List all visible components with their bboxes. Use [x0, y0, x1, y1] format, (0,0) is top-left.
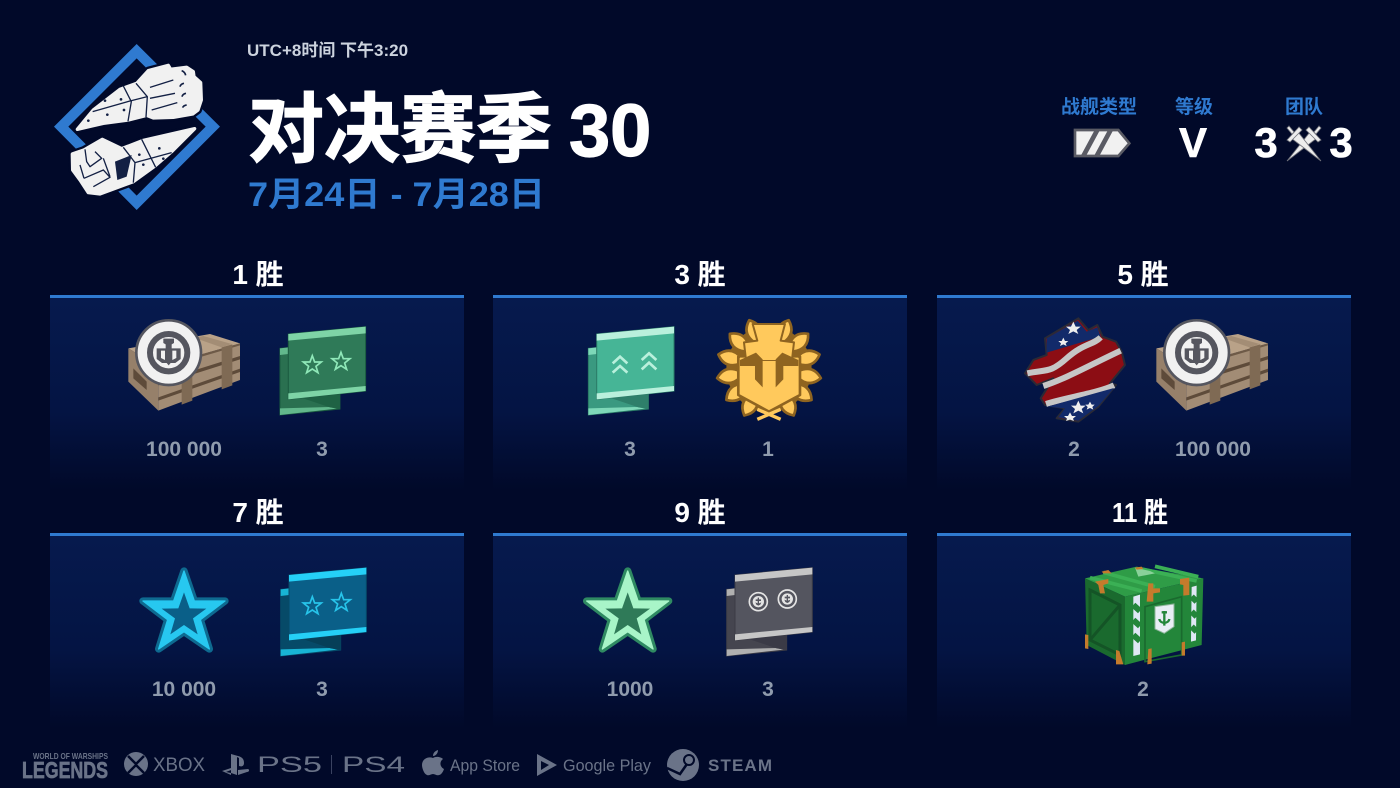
title: 30 — [569, 89, 651, 172]
info: tier: V — [1179, 119, 1207, 166]
panel: 1 win: 100 000 — [146, 438, 222, 461]
info: ship type: 战舰类型 — [1061, 96, 1137, 118]
info: tier: 等级 — [1175, 95, 1213, 118]
panel: 1 win: 3 — [316, 438, 328, 461]
logo: Google Play: Google Play — [563, 756, 651, 775]
icon: crossed swords — [1287, 126, 1321, 161]
panel: 1 win — [50, 259, 464, 490]
logo: crossed gauntlets in diamond — [54, 44, 220, 210]
panel: 5 wins: 5 胜 — [1117, 259, 1169, 290]
panel: 5 wins — [937, 259, 1351, 490]
logo: PlayStation — [222, 752, 405, 777]
panel: 5 wins: 2 — [1068, 438, 1080, 461]
panel: 3 wins: 3 — [624, 438, 636, 461]
logo: Xbox — [124, 752, 205, 776]
logo: App Store: App Store — [450, 756, 520, 775]
panel: 1 win: 1 胜 — [232, 259, 284, 290]
timestamp: UTC+8时间 下午3:20 — [247, 40, 408, 60]
logo: World of Warships Legends: WORLD OF WARSHIPS — [33, 751, 108, 761]
info: team size: 3 — [1329, 119, 1353, 166]
panel: 3 wins: 1 — [762, 438, 774, 461]
logo: PlayStation: PS4 — [342, 752, 405, 777]
panel: 11 wins: 2 — [1137, 678, 1149, 701]
logo: World of Warships Legends: LEGENDS — [22, 757, 108, 783]
icon: ship class — [1075, 130, 1129, 156]
panel: 7 wins: 10 000 — [152, 678, 216, 701]
panel: 11 wins — [937, 497, 1351, 728]
panel: 7 wins: 7 胜 — [232, 497, 284, 528]
info: tier — [1175, 95, 1213, 166]
panel: 7 wins — [50, 497, 464, 728]
lower gauntlet — [72, 129, 195, 194]
info: ship type — [1061, 96, 1137, 156]
panel: 11 wins: 11 胜 — [1112, 497, 1168, 528]
info: team size — [1254, 96, 1353, 166]
icon: stars and stripes camouflage — [1025, 318, 1125, 422]
icon: green container — [1085, 566, 1203, 665]
dates: 7月24日 - 7月28日 — [248, 176, 545, 214]
icon: credits crate — [128, 320, 240, 411]
panel: 3 wins: 3 胜 — [674, 259, 726, 290]
icon: teal chevron signal — [588, 327, 674, 415]
logo: PlayStation: PS5 — [257, 752, 322, 777]
panel: 9 wins: 1000 — [607, 678, 653, 701]
panel: 7 wins: 3 — [316, 678, 328, 701]
logo: Google Play — [537, 754, 651, 776]
icon: green star signal — [280, 327, 366, 415]
panel: 9 wins: 9 胜 — [674, 497, 726, 528]
logo: Steam — [667, 749, 772, 781]
logo: Xbox: XBOX — [153, 755, 205, 776]
title: 对决赛季 — [248, 88, 552, 173]
footer: platform logos — [22, 749, 772, 783]
logo: World of Warships Legends — [22, 751, 108, 783]
logo: Steam: STEAM — [708, 756, 772, 775]
upper gauntlet — [77, 65, 201, 129]
icon: credits crate — [1156, 320, 1268, 411]
panel: 9 wins — [493, 497, 907, 728]
panel: 3 wins — [493, 259, 907, 490]
icon: gold wreath medal — [716, 318, 822, 419]
icon: blue star signal — [281, 568, 366, 656]
panel: 9 wins: 3 — [762, 678, 774, 701]
logo: App Store — [422, 750, 520, 775]
icon: blue star — [143, 571, 225, 649]
icon: grey anchor signal — [727, 568, 812, 656]
panel: 5 wins: 100 000 — [1175, 438, 1251, 461]
info: team size: 3 — [1254, 119, 1278, 166]
icon: green star — [587, 571, 669, 649]
info: team size: 团队 — [1285, 96, 1323, 118]
